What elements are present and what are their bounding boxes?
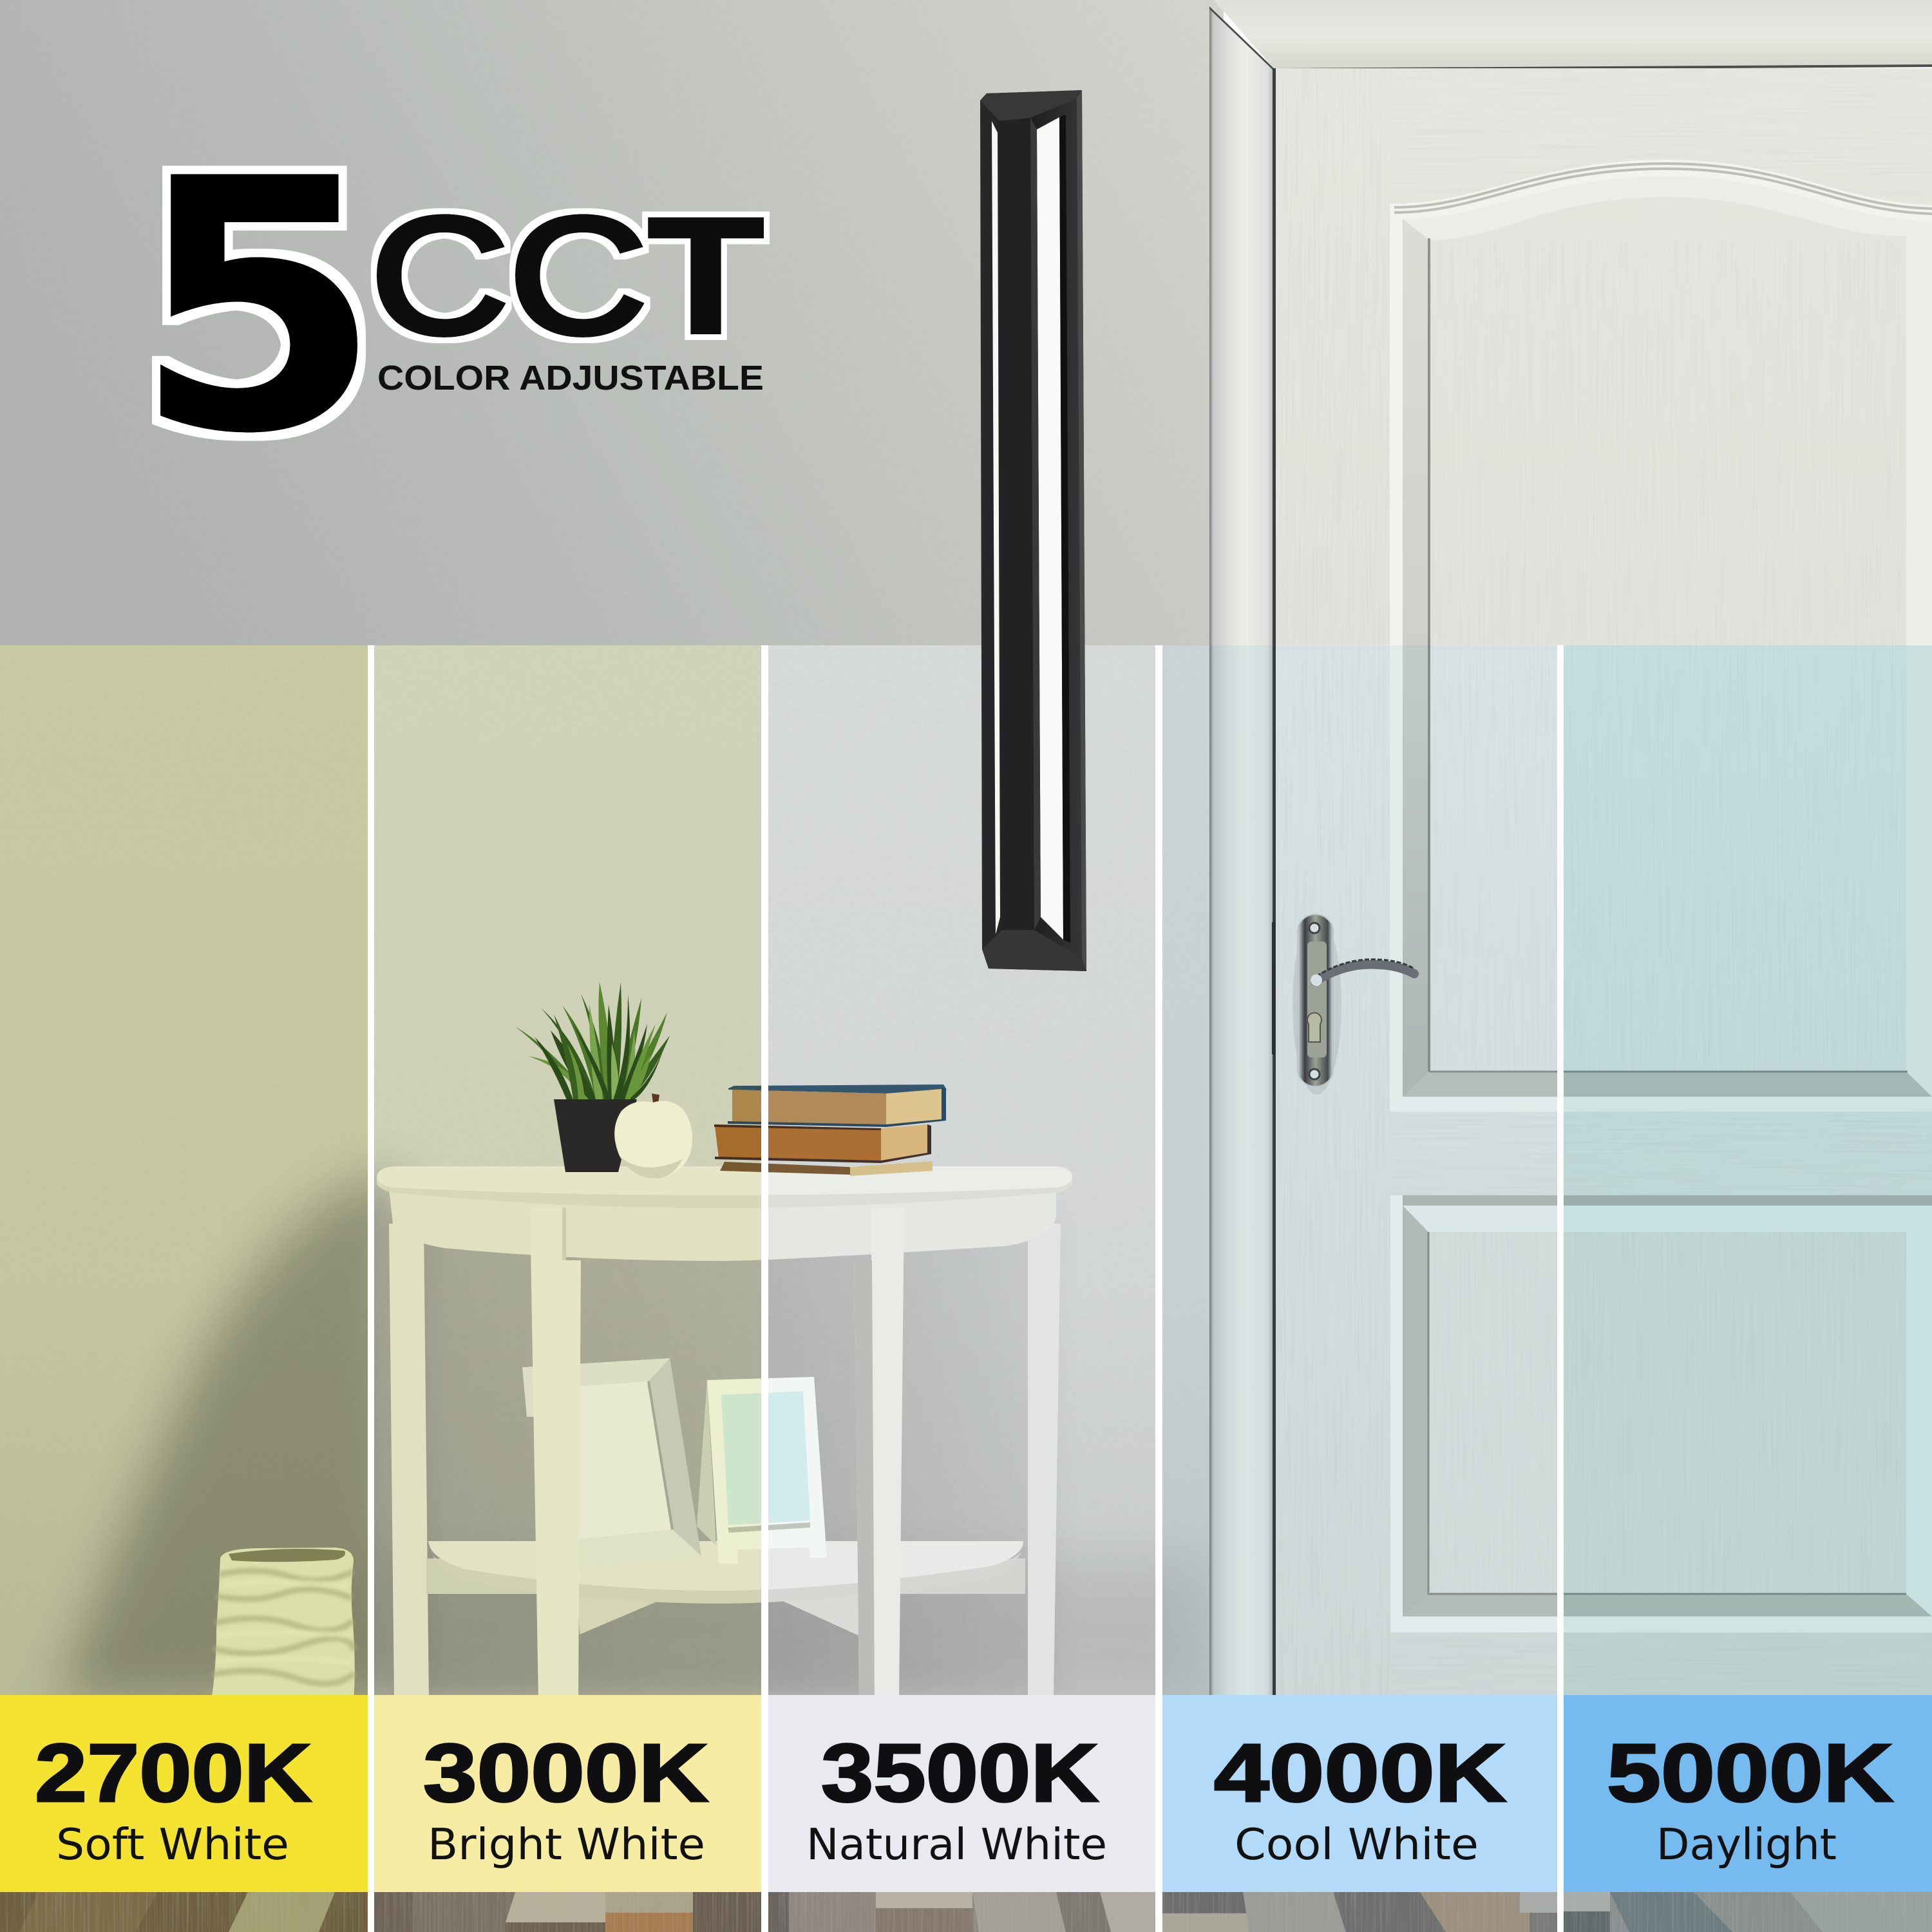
door gap line [1273,68,1276,1700]
shelf brace [577,1591,859,1636]
bottom bevel [982,930,1086,971]
stack of books [714,1084,947,1176]
upper door panel [1390,160,1932,1112]
lower shelf [428,1541,1023,1591]
floor wood grain [0,1892,1932,1932]
front right leg [855,1208,904,1700]
top book [728,1084,947,1127]
leaves [515,982,670,1100]
floor: 4000K [1162,1892,1557,1932]
band: 5000K Daylight [1564,1695,1932,1892]
band: 2700K Soft White: 2700K [35,1727,312,1819]
band: 4000K Cool White: 4000K [1214,1727,1506,1819]
floor shadow glow at wall base [361,1558,1211,1700]
right light window [1037,117,1063,940]
table cast shadow on left wall [58,1173,399,1700]
bottom book [720,1161,933,1176]
shaded wall under table [399,1211,1056,1700]
subtitle: COLOR ADJUSTABLE [377,359,764,397]
band: 2700K Soft White [0,1695,368,1892]
title: 5 CCT Color Adjustable [133,106,764,510]
tint: 3500K column [768,645,1155,1695]
header wall [0,0,1224,645]
white column dividers [368,645,1564,1932]
door handle [1272,914,1414,1095]
top bevel [980,90,1082,121]
wood floor strips [0,1892,1932,1932]
ceramic apple [614,1094,692,1179]
door leaf [1272,68,1932,1700]
CCT heading: CCT [370,182,764,368]
band: 4000K Cool White [1162,1695,1557,1892]
left light window [992,121,1000,934]
right edge [1077,90,1086,971]
wall light fixture [980,90,1086,971]
back right leg [1028,1224,1061,1700]
front left leg [530,1208,581,1700]
lower door panel [1390,1195,1932,1633]
casing shadow line [1209,6,1932,71]
right window reveal [1059,115,1070,943]
floor: 3500K [768,1892,1155,1932]
door casing [1209,0,1932,1700]
console table [377,1166,1072,1700]
band: 3500K Natural White [768,1695,1155,1892]
tint: 4000K column [1162,645,1557,1695]
middle book [714,1124,931,1163]
side casing [1209,6,1274,1700]
floor: 3000K [374,1892,761,1932]
band: 3500K Natural White: Natural White [806,1819,1107,1870]
small white picture frame [697,1377,827,1564]
apron [389,1189,1056,1261]
ceramic vase [211,1548,355,1700]
centre panel [999,121,1034,930]
potted plant [515,982,670,1172]
band: 5000K Daylight: Daylight [1656,1819,1837,1870]
band: 3000K Bright White [374,1695,761,1892]
back left leg [389,1224,429,1700]
band: 5000K Daylight: 5000K [1607,1727,1893,1819]
band: 3000K Bright White: 3000K [423,1727,708,1819]
tint: 3000K column [374,645,761,1695]
tint: 5000K column [1564,645,1932,1695]
floor: 5000K [1564,1892,1932,1932]
fixture body [980,90,1086,971]
silver picture frame [522,1358,701,1569]
tint: 2700K column [0,645,368,1695]
colour temperature tints over the room [0,645,1932,1695]
top casing [1213,0,1932,68]
big numeral 5: 5 [133,106,383,510]
wall plaster texture [0,0,1224,1700]
band: 3000K Bright White: Bright White [428,1819,705,1870]
lower wall [0,645,1224,1701]
band: 2700K Soft White: Soft White [56,1819,289,1870]
band: 3500K Natural White: 3500K [821,1727,1099,1819]
floor: 2700K [0,1892,368,1932]
pot [554,1099,637,1172]
band: 4000K Cool White: Cool White [1235,1819,1479,1870]
table top [377,1166,1072,1208]
